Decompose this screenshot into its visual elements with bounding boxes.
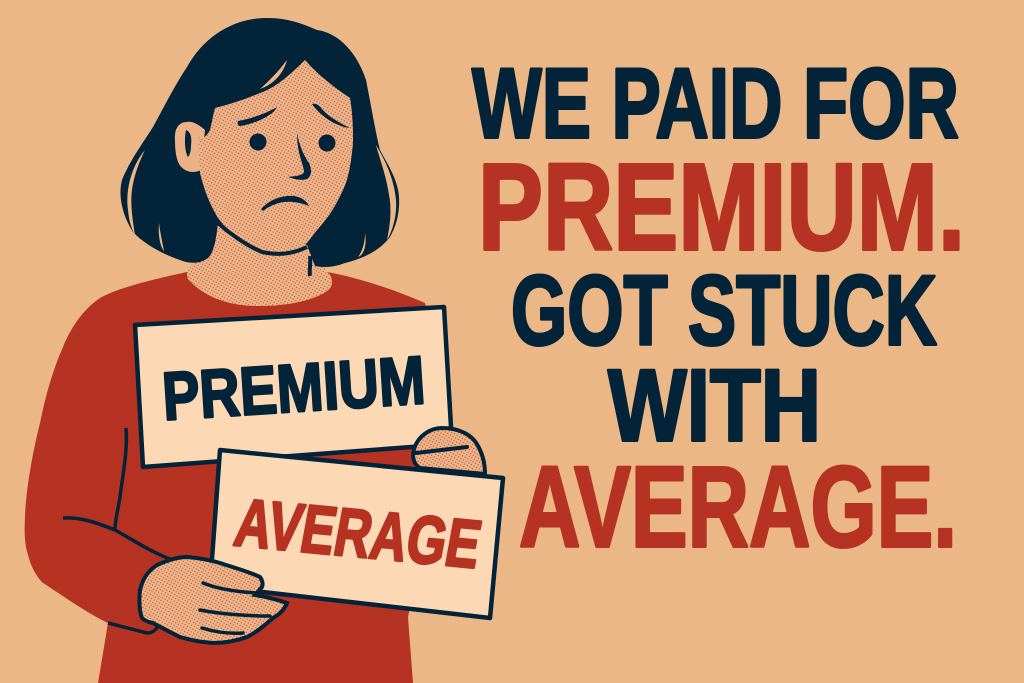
right eyebrow — [312, 104, 350, 128]
headline — [472, 48, 965, 572]
neck shadow line — [308, 256, 312, 276]
illustration: worried woman — [25, 18, 458, 683]
left eye — [250, 134, 266, 150]
hair — [120, 18, 399, 267]
sleeve line — [63, 518, 175, 561]
lower hand — [139, 557, 287, 643]
cuff line — [108, 623, 158, 633]
upper hand — [413, 428, 485, 474]
underarm line — [115, 428, 126, 530]
ear — [175, 122, 205, 172]
average sign — [210, 450, 503, 618]
shirt — [25, 272, 458, 683]
jaw line — [218, 223, 307, 254]
neck — [187, 223, 332, 306]
premium sign — [135, 307, 452, 467]
mouth — [261, 196, 309, 211]
average sign: AVERAGE — [229, 485, 487, 583]
headline: WITH — [608, 348, 821, 462]
premium sign: PREMIUM — [160, 342, 427, 435]
right eye — [318, 134, 336, 152]
nose — [288, 133, 311, 180]
inner ear — [185, 130, 191, 157]
left eyebrow — [238, 107, 277, 126]
face — [198, 60, 353, 253]
hair strand gaps — [127, 60, 396, 257]
